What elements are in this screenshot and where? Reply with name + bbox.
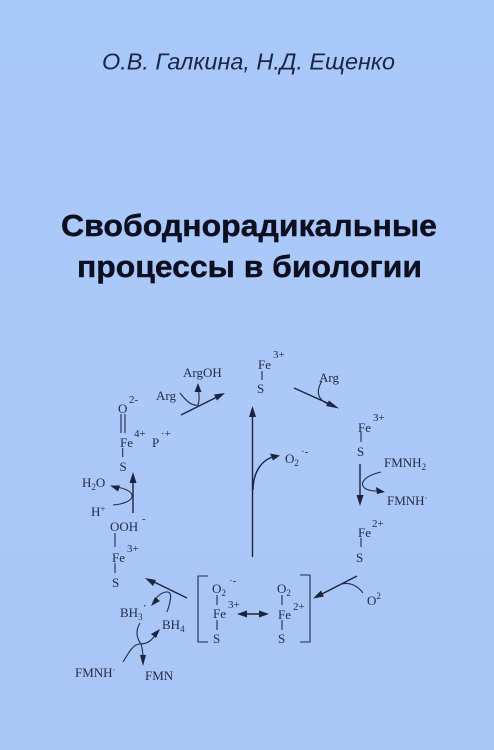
complex: Fe3+ S top: Fe [258, 357, 271, 372]
complex: Fe3+ S right: 3+ [373, 412, 385, 424]
complex: Fe3+ S top: S [257, 381, 264, 396]
arrows: borohydride coupling [123, 592, 171, 666]
complex: OOH Fe3+: 3+ [127, 543, 139, 555]
complex: Fe3+ S top: 3+ [273, 349, 285, 361]
arrow: to OOH complex [145, 578, 187, 598]
label: ArgOH: ArgOH [183, 365, 222, 380]
complex: Fe3+ S top [257, 349, 285, 396]
complex: superoxide Fe3+: O [212, 581, 221, 596]
complex: OOH Fe3+: OOH [110, 519, 138, 534]
label: Arg right: Arg [319, 370, 339, 385]
label: water: O [96, 475, 105, 490]
label: superoxide [285, 446, 309, 468]
arrow: oxygen binding [313, 576, 363, 598]
complex: superoxide Fe3+ [212, 575, 240, 646]
label: FMNH radical: · [425, 493, 428, 503]
complex: OOH Fe3+: S [112, 575, 119, 590]
arrow: resonance [237, 610, 269, 618]
complex: Fe2+ S right [356, 518, 384, 565]
title: Свободнорадикальные [61, 208, 437, 243]
label: O2 right: 2 [376, 591, 381, 601]
label: superoxide: O [285, 451, 294, 466]
complex: superoxide Fe3+: Fe [213, 606, 226, 621]
bracketed complexes [198, 575, 310, 646]
label: O2 right: O [367, 593, 376, 608]
complex: ferryl Fe4+ with porphyrin radical: O [118, 401, 127, 416]
complex: superoxide Fe3+: 3+ [228, 599, 240, 611]
label: BH3 radical: · [143, 598, 147, 613]
title: процессы в биологии [77, 249, 422, 284]
complex: superoxide Fe3+: 2 [221, 588, 226, 598]
complex: ferryl Fe4+ with porphyrin radical: S [120, 459, 127, 474]
complex: superoxide Fe3+: S [213, 631, 220, 646]
arrow: Arg oxidation [180, 383, 225, 415]
label: BH4: BH [162, 617, 180, 632]
complex: Fe3+ S right: S [357, 444, 364, 459]
label: proton: + [100, 504, 105, 514]
label: BH3 radical: 3 [138, 612, 143, 622]
complex: OOH Fe3+: Fe [112, 550, 125, 565]
complex: Fe2+ S right: S [356, 550, 363, 565]
complex: Fe2+ S right: Fe [358, 525, 371, 540]
title [61, 208, 437, 284]
complex: ferryl Fe4+ with porphyrin radical: Fe [120, 435, 133, 450]
arrow: OOH to ferryl [110, 472, 136, 513]
arrow: superoxide release [253, 454, 280, 490]
complex: O2 Fe2+: 2 [286, 588, 291, 598]
label: proton: H [91, 504, 100, 519]
complex: O2 Fe2+: O [277, 581, 286, 596]
label: FMNH radical bottom: · [113, 665, 116, 675]
label: water: H [82, 475, 91, 490]
complex: Fe3+ S right: Fe [358, 420, 371, 435]
label: FMNH2: 2 [422, 462, 426, 472]
complex: superoxide Fe3+: ·- [229, 575, 237, 587]
complex: Fe3+ S right [357, 412, 385, 459]
label: FMNH radical bottom: FMNH [75, 665, 113, 680]
label: Arg left: Arg [156, 388, 176, 403]
complex: ferryl Fe4+ with porphyrin radical: 4+ [134, 428, 146, 440]
label: BH4: 4 [180, 624, 185, 634]
arrow: Arg to Fe3+ right [294, 381, 339, 408]
complex: OOH Fe3+ [110, 513, 146, 590]
label: FMNH radical: FMNH [387, 493, 425, 508]
label: superoxide: 2 [294, 458, 299, 468]
complex: ferryl Fe4+ with porphyrin radical: P [152, 435, 159, 450]
label: superoxide: ·- [301, 446, 309, 458]
complex: OOH Fe3+: - [142, 513, 146, 525]
complex: ferryl Fe4+ with porphyrin radical: 2- [129, 394, 138, 406]
arrow: long vertical up [249, 406, 256, 557]
complex: ferryl Fe4+ with porphyrin radical: ·+ [161, 428, 171, 440]
complex: O2 Fe2+ [277, 581, 305, 646]
label: FMNH2: FMNH [384, 455, 422, 470]
label: BH3 radical: BH [120, 605, 138, 620]
arrow: down with FMNH [356, 464, 385, 506]
complex: ferryl Fe4+ with porphyrin radical [118, 394, 171, 474]
complex: O2 Fe2+: Fe [278, 607, 291, 622]
label: water: 2 [91, 482, 96, 492]
complex: Fe2+ S right: 2+ [372, 518, 384, 530]
complex: O2 Fe2+: S [278, 631, 285, 646]
complex: O2 Fe2+: 2+ [293, 601, 305, 613]
authors: О.В. Галкина, Н.Д. Ещенко [102, 48, 395, 74]
label: FMN: FMN [145, 668, 174, 683]
reaction cycle diagram [75, 349, 428, 683]
